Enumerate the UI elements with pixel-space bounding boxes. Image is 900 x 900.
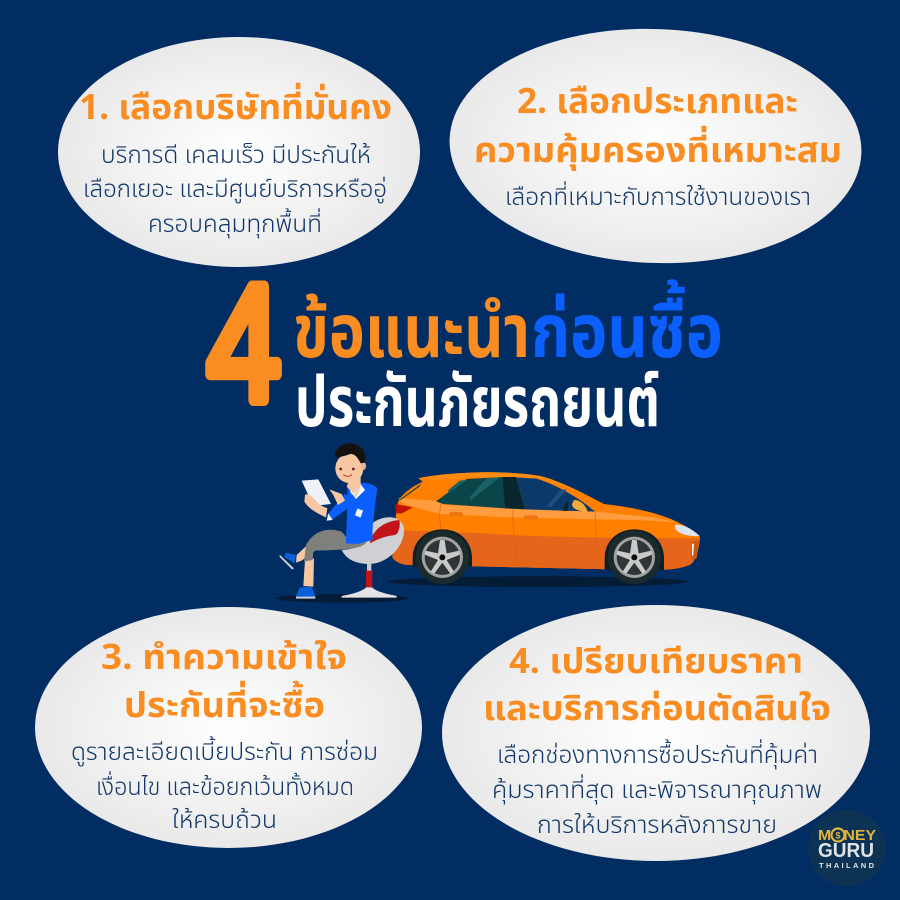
- text: tip 4 body: การให้บริการหลังการขาย: [537, 808, 777, 844]
- logo coin: $: [835, 830, 841, 840]
- title: [207, 251, 723, 458]
- illustration: man and car: [275, 443, 700, 603]
- heading: tip 3: ประกันที่จะซื้อ: [124, 680, 325, 733]
- panel: tip 1: [58, 37, 420, 267]
- text: tip 1 body: [83, 138, 387, 243]
- text: tip 3 body: เงื่อนไข และข้อยกเว้นทั้งหมด: [96, 770, 354, 806]
- numeral 4: 4: [207, 251, 281, 435]
- heading: tip 2: 2. เลือกประเภทและ: [517, 76, 798, 129]
- heading: tip 2: ความคุ้มครองที่เหมาะสม: [474, 125, 842, 178]
- heading: tip 4: 4. เปรียบเทียบราคา: [509, 636, 803, 689]
- text: tip 4 body: [492, 738, 822, 844]
- title line 1: ข้อแนะนำ: [293, 277, 530, 391]
- logo: Money Guru Thailand: THAILAND: [819, 861, 875, 870]
- icon: egg chair: [342, 517, 404, 598]
- text: tip 1 body: เลือกเยอะ และมีศูนย์บริการหรืออู่: [83, 172, 387, 208]
- text: tip 4 body: คุ้มราคาที่สุด และพิจารณาคุณภาพ: [492, 773, 822, 809]
- heading: tip 3: [101, 632, 347, 733]
- logo: Money Guru Thailand: MONEY: [818, 827, 876, 844]
- rear wheel: [413, 529, 472, 584]
- title line 2: ประกันภัยรถยนต์: [295, 352, 660, 458]
- icon: car: [392, 472, 700, 584]
- heading: tip 1: 1. เลือกบริษัทที่มั่นคง: [79, 82, 392, 135]
- panel: tip 3: [35, 607, 422, 848]
- panel: tip 2: [446, 22, 865, 270]
- heading: tip 4: และบริการก่อนตัดสินใจ: [483, 683, 831, 736]
- text: tip 3 body: ให้ครบถ้วน: [172, 803, 277, 839]
- panel: tip 4: [442, 605, 870, 861]
- car shadow: [388, 576, 688, 587]
- man shadow: [275, 594, 408, 603]
- logo: Money Guru Thailand: [808, 810, 886, 886]
- heading: tip 3: 3. ทำความเข้าใจ: [101, 632, 347, 685]
- text: tip 4 body: เลือกช่องทางการซื้อประกันที่คุ้มค่า: [497, 738, 818, 774]
- title line 1: ก่อนซื้อ: [531, 277, 723, 391]
- text: tip 3 body: ดูรายละเอียดเบี้ยประกัน การซ่อม: [71, 735, 378, 771]
- text: tip 1 body: บริการดี เคลมเร็ว มีประกันให้: [101, 138, 371, 174]
- text: tip 2 body: เลือกที่เหมาะกับการใช้งานของเรา: [505, 180, 811, 216]
- text: tip 1 body: ครอบคลุมทุกพื้นที่: [148, 207, 322, 243]
- text: tip 3 body: [71, 735, 378, 839]
- icon: man reading tablet: [279, 443, 377, 599]
- front wheel: [605, 529, 664, 584]
- heading: tip 4: [483, 636, 831, 736]
- title line 1: [293, 277, 723, 391]
- heading: tip 2: [474, 76, 842, 178]
- logo: Money Guru Thailand: GURU: [818, 840, 874, 862]
